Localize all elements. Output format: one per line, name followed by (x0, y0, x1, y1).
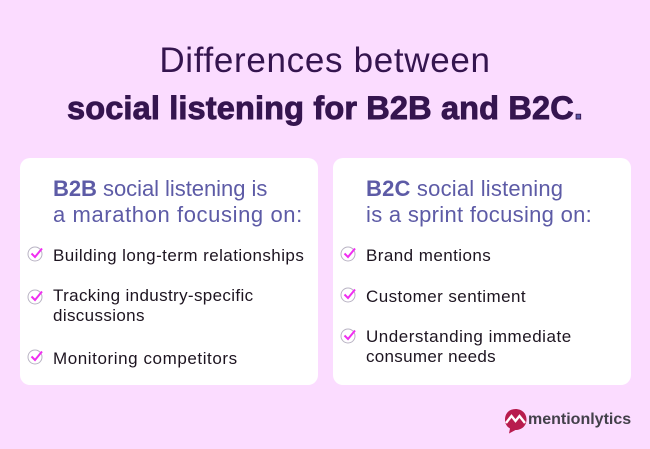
item: sentiment (340, 287, 526, 306)
item: brand mentions (340, 246, 491, 265)
B2B heading: B2B social listening is (53, 176, 267, 201)
title line 1: Differences between (159, 41, 491, 80)
panel: B2C (333, 158, 631, 385)
icon: check (28, 290, 43, 304)
B2B heading: a marathon focusing on: (53, 202, 303, 227)
icon: check (340, 288, 356, 302)
item text (53, 286, 254, 325)
logo text: mentionlytics (528, 411, 631, 428)
item text: discussions (53, 306, 145, 325)
icon: check (340, 246, 356, 262)
item text: Brand mentions (366, 246, 491, 265)
item: consumer needs (340, 327, 572, 366)
logo: mentionlytics (505, 409, 631, 434)
item text: consumer needs (366, 347, 496, 366)
item: discussions (28, 286, 254, 325)
item text: Customer sentiment (366, 287, 526, 306)
icon: logo bubble (505, 409, 526, 434)
icon: check (28, 350, 43, 364)
B2C heading: is a sprint focusing on: (366, 202, 592, 227)
icon: check (340, 328, 356, 344)
B2C heading: B2C social listening (366, 176, 563, 201)
item text (366, 327, 572, 366)
icon: check (28, 246, 43, 262)
item text: Building long-term relationships (53, 246, 304, 265)
panel: B2B (20, 158, 318, 385)
title (67, 41, 583, 126)
item: relationships (28, 246, 304, 265)
item text: Understanding immediate (366, 327, 572, 346)
B2C heading (366, 176, 592, 227)
B2B heading (53, 176, 303, 227)
title line 2: social listening for B2B and B2C. (67, 90, 583, 126)
item text: Monitoring competitors (53, 349, 238, 368)
item text: Tracking industry-specific (53, 286, 254, 305)
item: competitors (28, 349, 238, 368)
